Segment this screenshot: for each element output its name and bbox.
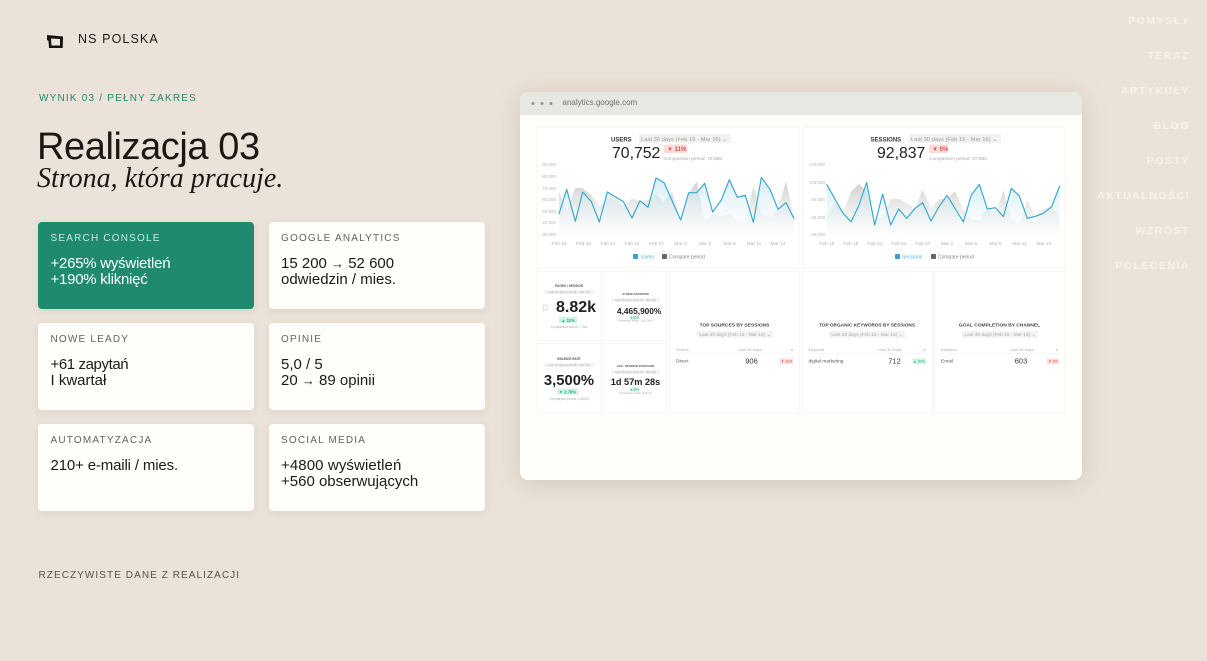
table: top sources: 906 <box>745 356 758 366</box>
metric: pages per session: PAGES / SESSION <box>555 284 584 288</box>
panel: sessions chart: Feb 24 <box>892 241 907 247</box>
panel: sessions chart: 92,837 <box>877 145 925 162</box>
metric: session duration: AVG. SESSION DURATION <box>617 364 654 368</box>
table: goal completion: Last 30 Days <box>1010 347 1034 352</box>
panel: sessions chart: Comparison period: 97,888 <box>929 156 987 162</box>
panel: sessions chart: Compare period <box>938 254 974 260</box>
panel: sessions chart: Mar 11 <box>1012 241 1027 247</box>
metric: session duration: 1d 57m 28s <box>611 377 660 387</box>
logo <box>47 32 159 48</box>
metric: new sessions <box>604 271 667 340</box>
card: opinie: OPINIE <box>281 334 322 344</box>
panel: sessions chart: Mar 14 <box>1037 241 1052 247</box>
table: top organic keywords <box>802 271 932 413</box>
panel: users chart: 70,000 <box>542 186 556 191</box>
table: goal completion <box>934 271 1065 413</box>
metric: new sessions: Comparison period: 3,600,000% <box>618 320 654 322</box>
table: goal completion: Keyword <box>941 347 957 352</box>
table: goal completion: Δ <box>1056 347 1059 352</box>
card: google analytics: GOOGLE ANALYTICS <box>281 232 401 244</box>
panel: sessions chart: Sessions <box>902 254 923 260</box>
side navigation: POLECENIA <box>1115 260 1190 272</box>
metric: new sessions: 4,465,900% <box>617 306 662 316</box>
panel: users chart: Feb 18 <box>576 241 591 247</box>
panel: users chart: Feb 21 <box>601 241 616 247</box>
table: top organic keywords: Keyword <box>808 347 824 352</box>
card: social media: +560 obserwujących <box>281 473 418 490</box>
metric: new sessions: % NEW SESSIONS <box>622 292 649 296</box>
panel: users chart: 60,000 <box>542 197 556 202</box>
side navigation: WZROST <box>1136 225 1190 237</box>
panel: users chart: Compare period <box>669 254 705 260</box>
panel: users chart: USERS <box>611 138 632 144</box>
title: Realizacja 03 <box>37 126 260 168</box>
panel: users chart: Users <box>641 254 655 260</box>
card: social media: SOCIAL MEDIA <box>281 434 366 446</box>
side navigation: POSTY <box>1147 155 1190 167</box>
metric: session duration: Comparison period: 1d 0h 0m <box>619 392 652 395</box>
table: goal completion: 603 <box>1015 356 1027 366</box>
panel: users chart: 80,000 <box>542 174 556 179</box>
panel: sessions chart: 100,000 <box>809 180 825 185</box>
eyebrow: WYNIK 03 / PEŁNY ZAKRES <box>39 93 197 104</box>
panel: users chart <box>537 127 799 268</box>
side navigation: ARTYKUŁY <box>1121 85 1190 97</box>
panel: users chart: Mar 11 <box>747 241 762 247</box>
table: top organic keywords: 712 <box>888 356 901 366</box>
card: opinie: 5,0 / 5 <box>281 356 323 372</box>
metric: pages per session: Last 30 days (Feb 15 - Mar 16) <box>548 290 590 294</box>
card: opinie: 20 → 89 opinii <box>281 372 375 389</box>
card: social media: +4800 wyświetleń <box>281 456 401 474</box>
panel: users chart: Mar 5 <box>699 241 711 247</box>
card: search console: SEARCH CONSOLE <box>50 232 161 244</box>
table: top sources: Last 30 days (Feb 15 - Mar 16) ⌄ <box>699 332 771 338</box>
metric: bounce rate: BOUNCE RATE <box>557 357 581 361</box>
table: goal completion: ▼ 8% <box>1048 360 1058 364</box>
card: google analytics <box>268 222 484 309</box>
footnote: RZECZYWISTE DANE Z REALIZACJI <box>38 570 240 581</box>
window dots <box>532 102 552 105</box>
card: search console: +190% kliknięć <box>50 271 147 288</box>
panel: sessions chart: 40,000 <box>811 232 825 237</box>
side navigation: BLOG <box>1154 120 1190 132</box>
metric: pages per session: Comparison period: 7.92k <box>551 325 588 329</box>
metric: session duration <box>604 344 667 413</box>
side navigation <box>1097 15 1190 272</box>
panel: sessions chart: Mar 2 <box>941 241 953 247</box>
table: top sources: TOP SOURCES BY SESSIONS <box>700 322 770 328</box>
panel: sessions chart: 120,000 <box>809 162 825 167</box>
side navigation: POMYSŁY <box>1128 15 1190 27</box>
panel: users chart: 50,000 <box>542 209 556 214</box>
metric: session duration: Last 30 days (Feb 15 - Mar 16) <box>615 370 656 374</box>
card: automatyzacja: AUTOMATYZACJA <box>50 434 152 446</box>
metric: new sessions: ▲20% <box>630 316 639 320</box>
panel: users chart: 70,752 <box>612 145 660 162</box>
panel: users chart: 90,000 <box>542 162 556 167</box>
subtitle: Strona, która pracuje. <box>37 163 283 194</box>
card: opinie <box>268 323 484 410</box>
panel: users chart: Feb 15 <box>552 241 567 247</box>
panel: users chart: ▼ 11% <box>667 147 687 153</box>
panel: sessions chart: Mar 8 <box>989 241 1002 247</box>
panel: users chart: Feb 27 <box>649 241 664 247</box>
card: google analytics: odwiedzin / mies. <box>281 271 396 288</box>
metric: bounce rate <box>537 344 601 413</box>
panel: users chart: 40,000 <box>542 220 556 225</box>
table: top sources: Δ <box>791 347 794 352</box>
table: top sources: Last 30 Days <box>738 347 762 352</box>
card: nowe leady: I kwartał <box>50 372 106 389</box>
card: search console <box>38 222 254 309</box>
table: goal completion: Email <box>941 358 953 364</box>
panel: users chart: Mar 2 <box>674 241 687 247</box>
panel: sessions chart: 80,000 <box>811 197 825 202</box>
panel: sessions chart: Feb 27 <box>916 241 931 247</box>
card: automatyzacja: 210+ e-maili / mies. <box>50 456 178 474</box>
panel: sessions chart: Feb 18 <box>844 241 859 247</box>
panel: sessions chart: Feb 15 <box>820 241 835 247</box>
panel: sessions chart: SESSIONS <box>870 138 901 144</box>
table: top sources: ▼ 16% <box>781 360 792 364</box>
table: goal completion: Last 30 days (Feb 15 - Mar 16) ⌄ <box>964 332 1036 338</box>
panel: users chart: Feb 24 <box>625 241 640 247</box>
url: analytics.google.com <box>562 98 638 107</box>
side navigation: AKTUALNOŚCI <box>1097 190 1190 202</box>
panel: sessions chart <box>803 127 1065 268</box>
table: top organic keywords: digital marketing <box>808 358 844 364</box>
card: nowe leady: NOWE LEADY <box>50 334 129 344</box>
table: top organic keywords: Δ <box>923 347 926 352</box>
table: top organic keywords: TOP ORGANIC KEYWORDS BY SESSIONS <box>819 322 915 328</box>
panel: sessions chart: Last 30 days (Feb 15 - Mar 16) ⌄ <box>911 137 997 143</box>
side navigation: TERAZ <box>1148 50 1190 62</box>
metric: bounce rate: 3,500% <box>544 373 594 389</box>
table: top sources: Direct <box>676 358 689 364</box>
card: search console: +265% wyświetleń <box>50 254 170 272</box>
table: goal completion: GOAL COMPLETION BY CHANNEL <box>959 322 1040 328</box>
panel: sessions chart: ▼ 5% <box>932 147 949 153</box>
panel: users chart: Last 30 days (Feb 15 - Mar 16) ⌄ <box>641 137 727 143</box>
card: social media <box>268 424 484 511</box>
table: top organic keywords: Last 30 Days <box>878 347 902 352</box>
metric: session duration: ▲20% <box>630 388 639 392</box>
card: automatyzacja <box>38 424 254 511</box>
metric: pages per session: ▲ 11% <box>561 318 575 323</box>
panel: users chart: 30,000 <box>542 232 556 237</box>
panel: users chart: Mar 8 <box>723 241 736 247</box>
metric: pages per session: 8.82k <box>556 299 596 316</box>
logo: NS POLSKA <box>78 32 159 46</box>
panel: sessions chart: 60,000 <box>811 215 825 220</box>
metric: bounce rate: Comparison period: 3,600% <box>549 397 589 401</box>
table: top organic keywords: Last 30 days (Feb 15 - Mar 16) ⌄ <box>831 332 903 338</box>
card: nowe leady <box>38 323 254 410</box>
metric: new sessions: Last 30 days (Feb 15 - Mar 16) <box>615 298 656 302</box>
card: google analytics: 15 200 → 52 600 <box>281 254 394 272</box>
table: top organic keywords: ▲ 20% <box>913 360 925 364</box>
metric: bounce rate: ▼ 2.78% <box>559 390 576 394</box>
panel: users chart: Mar 14 <box>771 241 786 247</box>
metric: pages per session <box>537 271 601 340</box>
panel: sessions chart: Feb 21 <box>868 241 883 247</box>
table: top sources <box>670 271 800 413</box>
metric: bounce rate: Last 30 days (Feb 15 - Mar 16) <box>548 363 590 367</box>
panel: sessions chart: Mar 5 <box>965 241 977 247</box>
table: top sources: Source <box>676 347 689 352</box>
panel: users chart: Comparison period: 79,858 <box>664 156 722 162</box>
card: nowe leady: +61 zapytań <box>50 356 128 372</box>
